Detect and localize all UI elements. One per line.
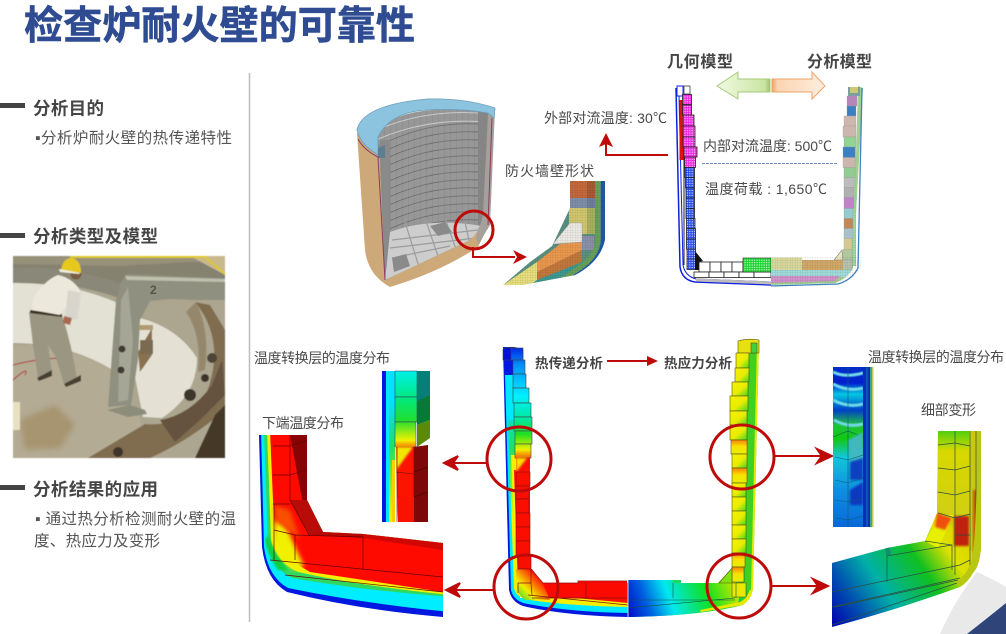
panel: lower left thermal detail <box>259 435 443 617</box>
section: application of results <box>0 480 236 550</box>
panel: upper right stress detail <box>833 367 874 527</box>
panel: lower right deformation detail <box>830 428 985 630</box>
circle: right upper <box>710 425 774 489</box>
section: application of results: 度、热应力及变形 <box>34 531 160 550</box>
circle: left upper <box>487 427 551 491</box>
wall mesh detail <box>503 181 605 285</box>
circle and arrow to wall detail <box>455 211 527 264</box>
circle: right lower <box>707 554 771 618</box>
arrow: left upper <box>444 456 487 470</box>
furnace 3D cutaway model <box>357 99 495 287</box>
arrow: left green <box>717 72 770 99</box>
central thermal U model: right half thermal stress <box>628 339 759 618</box>
circle: left lower <box>494 555 558 619</box>
arrow: right upper <box>774 449 832 463</box>
page curl corner <box>940 572 1006 634</box>
panel: left sidebar <box>0 98 236 550</box>
arrow: left lower <box>446 583 494 597</box>
section: application of results: ▪ 通过热分析检测耐火壁的温 <box>35 510 236 528</box>
red arrow: outer convection <box>599 133 668 155</box>
label: detail deformation: 细部变形 <box>921 402 976 418</box>
heading: geometry model: 几何模型 <box>667 52 733 71</box>
label: thermal stress analysis: 热应力分析 <box>664 355 732 371</box>
title: 检查炉耐火壁的可靠性 <box>24 5 415 48</box>
label: temperature load: 温度荷载 : 1,650℃ <box>705 181 827 197</box>
label: outer convection temperature: 外部对流温度: 30℃ <box>544 110 667 126</box>
section: analysis purpose: ▪分析炉耐火壁的热传递特性 <box>35 129 232 147</box>
label: upper left temperature layer: 温度转换层的温度分布 <box>254 350 390 366</box>
heading: analysis model: 分析模型 <box>807 52 872 71</box>
arrow: right orange <box>772 72 825 99</box>
arrow: heat transfer to thermal stress <box>607 356 658 366</box>
arrow: right lower <box>771 579 828 593</box>
photo: worker inside furnace <box>13 256 225 458</box>
photo: worker inside furnace: 2 <box>150 283 157 297</box>
section: analysis purpose <box>0 98 232 147</box>
analysis model half section (right) <box>771 86 863 286</box>
label: lower end temperature: 下端温度分布 <box>262 415 344 431</box>
section: analysis purpose: 分析目的 <box>33 98 104 118</box>
label: inner convection temperature: 内部对流温度: 500℃ <box>703 138 832 154</box>
label: upper right temperature layer: 温度转换层的温度分布 <box>868 349 1004 365</box>
label: firewall shape: 防火墙壁形状 <box>505 163 594 179</box>
panel: upper left thermal detail <box>382 371 430 522</box>
central thermal U model: left half heat transfer <box>503 347 632 617</box>
geometry model half section (left) <box>676 86 771 285</box>
section: analysis type and model: 分析类型及模型 <box>33 226 158 246</box>
section: application of results: 分析结果的应用 <box>33 480 158 500</box>
detail circles and arrows <box>444 425 832 619</box>
label: heat transfer analysis: 热传递分析 <box>535 355 604 371</box>
